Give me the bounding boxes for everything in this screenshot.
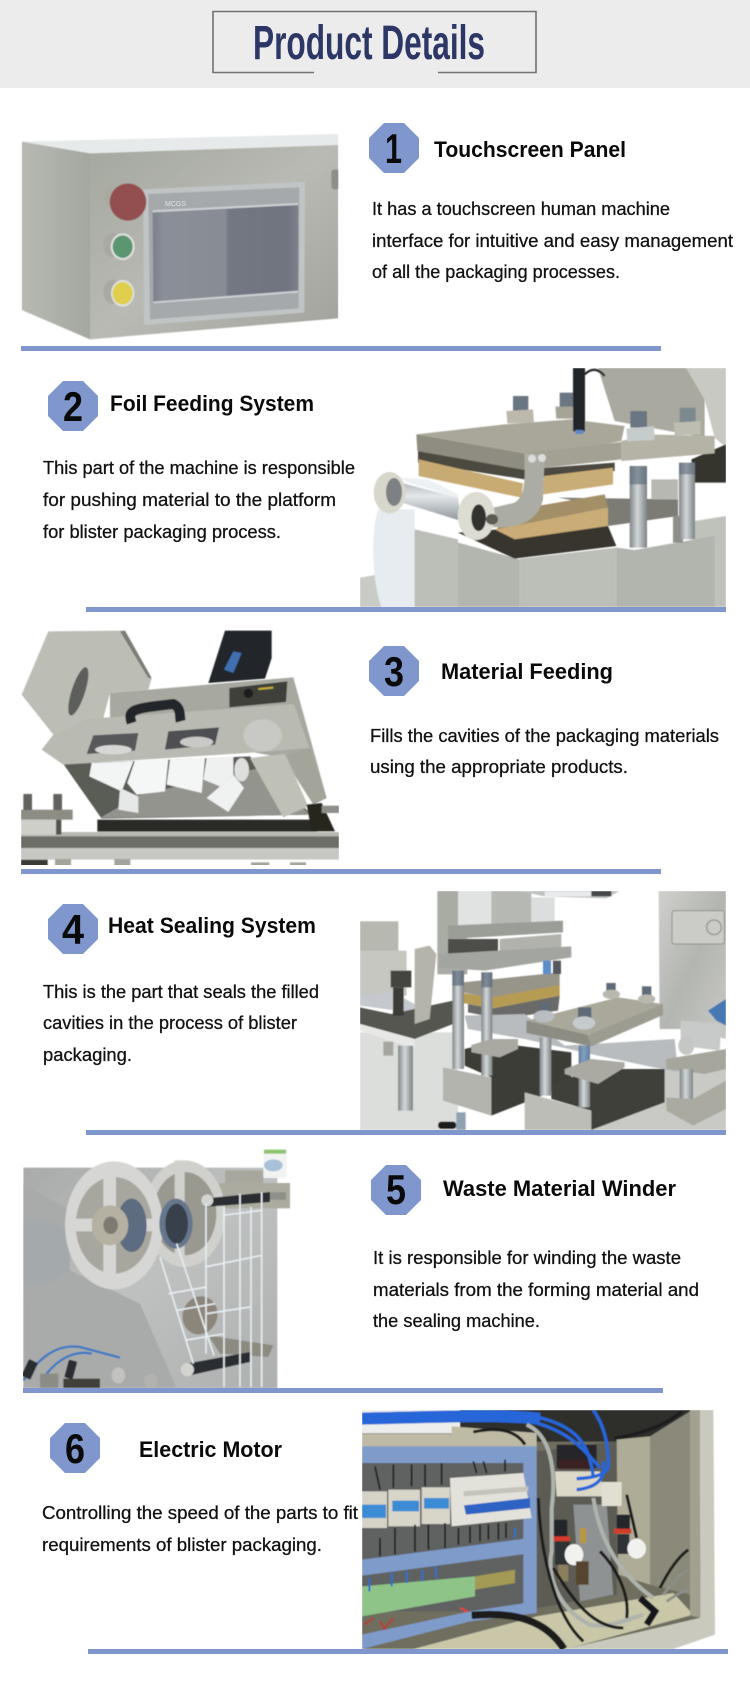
badge 1 xyxy=(369,123,419,173)
text block 4: This is the part that seals the filled xyxy=(43,981,319,1002)
text block 5: It is responsible for winding the waste xyxy=(373,1247,681,1268)
badge 5: 5 xyxy=(386,1166,406,1213)
text block 4: packaging. xyxy=(43,1044,132,1065)
heading 1: Touchscreen Panel xyxy=(434,137,626,162)
heading 3: Material Feeding xyxy=(441,659,613,684)
brand mark on touchscreen: MCGS xyxy=(165,201,186,208)
text block 2: for blister packaging process. xyxy=(43,521,281,542)
badge 3 xyxy=(369,646,419,696)
heading 2: Foil Feeding System xyxy=(110,391,314,416)
badge 4 xyxy=(48,904,98,954)
text block 5: materials from the forming material and xyxy=(373,1279,699,1300)
text block 6: Controlling the speed of the parts to fit xyxy=(42,1502,358,1523)
badge 6: 6 xyxy=(65,1425,85,1472)
text block 5 xyxy=(373,1247,699,1331)
text block 1: interface for intuitive and easy management xyxy=(372,230,733,251)
badge 3: 3 xyxy=(384,648,404,695)
photo: electric motor control cabinet xyxy=(362,1410,715,1649)
badge 1: 1 xyxy=(385,125,402,172)
text block 2 xyxy=(43,457,355,542)
text block 6 xyxy=(42,1502,358,1555)
text block 4 xyxy=(43,981,319,1065)
heading 4: Heat Sealing System xyxy=(108,913,316,938)
text block 1: of all the packaging processes. xyxy=(372,261,620,282)
photo: material feeding xyxy=(21,631,339,869)
text block 3: using the appropriate products. xyxy=(370,756,628,777)
text block 1 xyxy=(372,198,733,282)
heading 6: Electric Motor xyxy=(139,1437,282,1462)
text block 5: the sealing machine. xyxy=(373,1310,540,1331)
text block 1: It has a touchscreen human machine xyxy=(372,198,670,219)
title frame xyxy=(213,12,536,72)
heading 5: Waste Material Winder xyxy=(443,1176,676,1201)
header band xyxy=(0,0,750,88)
text block 3 xyxy=(370,725,719,777)
photo: waste material winder xyxy=(21,1150,290,1388)
text block 4: cavities in the process of blister xyxy=(43,1012,297,1033)
badge 2 xyxy=(48,381,98,431)
text block 2: for pushing material to the platform xyxy=(43,489,336,510)
text block 6: requirements of blister packaging. xyxy=(42,1534,322,1555)
photo: touchscreen panel xyxy=(22,134,340,339)
badge 2: 2 xyxy=(63,383,83,430)
text block 2: This part of the machine is responsible xyxy=(43,457,355,478)
photo: foil feeding system xyxy=(360,368,726,607)
badge 5 xyxy=(371,1165,421,1215)
badge 6 xyxy=(50,1423,100,1473)
text block 3: Fills the cavities of the packaging materials xyxy=(370,725,719,746)
photo: heat sealing system xyxy=(360,891,726,1130)
title: Product Details xyxy=(253,17,485,70)
badge 4: 4 xyxy=(62,906,85,953)
